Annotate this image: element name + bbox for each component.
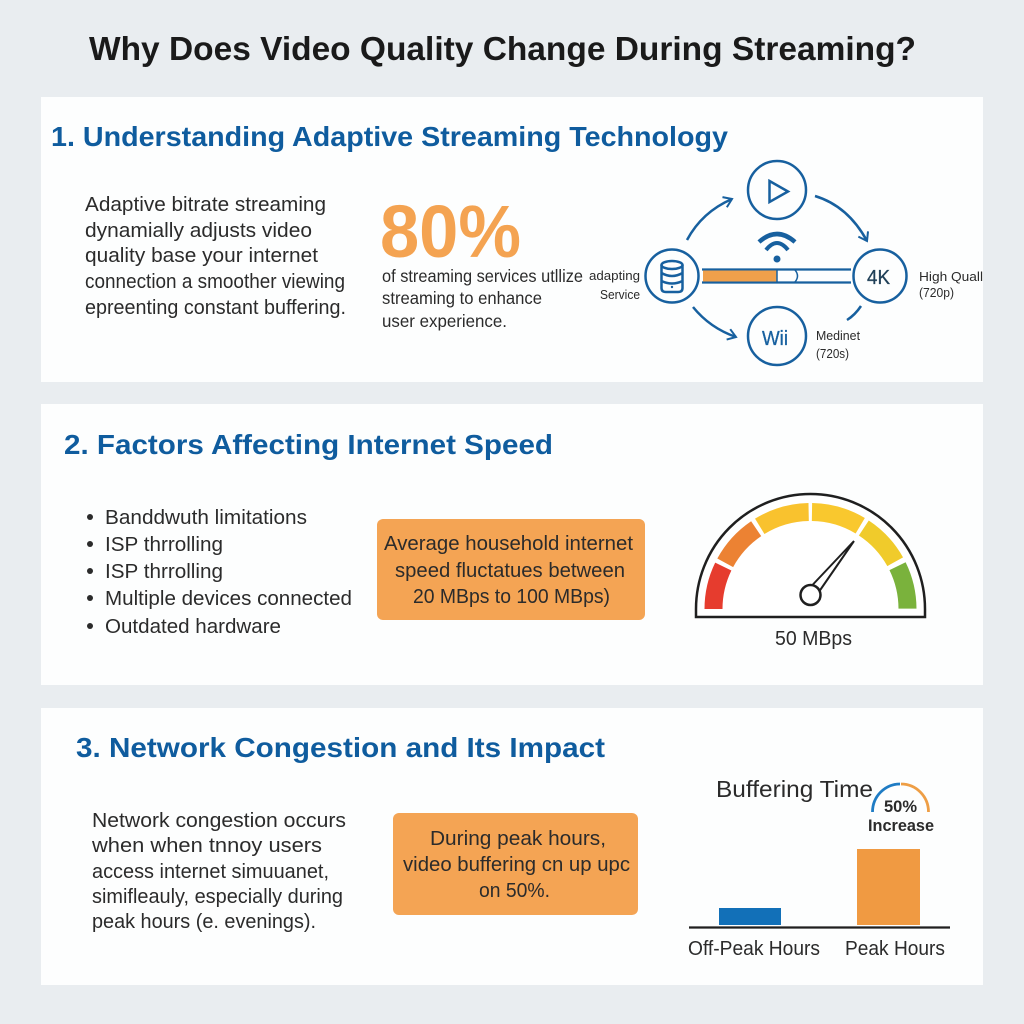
stat caption: of streaming services utllize: [382, 266, 583, 286]
text block: adaptive streaming description: epreenting constant buffering.: [85, 296, 346, 319]
callout: average household speed: Average household internet: [384, 532, 633, 555]
list: factors: [87, 506, 352, 638]
label: high quality: High Quall: [919, 269, 983, 284]
label: medium: [816, 328, 860, 361]
bar: off-peak: [719, 908, 781, 925]
stat caption: user experience.: [382, 311, 507, 331]
badge: 50 percent increase: Increase: [868, 816, 934, 835]
callout: average household speed: [377, 519, 645, 620]
stat caption: [382, 266, 583, 331]
arrow: play to 4K: [815, 196, 867, 241]
icon: database service: [646, 250, 698, 302]
callout: peak hours buffering: During peak hours,: [430, 827, 606, 850]
label: adapting service: [589, 268, 640, 302]
list: factors: Multiple devices connected: [105, 587, 352, 610]
text block: congestion description: when when tnnoy users: [91, 834, 322, 857]
label: adapting service: Service: [600, 287, 640, 302]
panel: network congestion: [41, 708, 983, 985]
list: factors: Outdated hardware: [105, 615, 281, 638]
chart title: Buffering Time: [716, 776, 873, 802]
text block: congestion description: [91, 809, 346, 933]
icon: 4K: [854, 250, 906, 302]
arrow: service to play: [687, 199, 732, 240]
text block: congestion description: peak hours (e. evenings).: [92, 910, 316, 933]
icon: wifi: [759, 234, 795, 262]
text block: adaptive streaming description: [85, 193, 346, 319]
text block: congestion description: Network congestion occurs: [92, 809, 346, 832]
arrow: 4K to Wii: [847, 306, 861, 320]
arrow: service to Wii: [693, 307, 736, 337]
panel: adaptive streaming: [41, 97, 983, 382]
diagram: adaptive streaming cycle: [589, 161, 983, 365]
title: Why Does Video Quality Change During Streaming?: [89, 31, 916, 68]
stat caption: streaming to enhance: [382, 288, 542, 308]
callout: peak hours buffering: [393, 813, 638, 915]
badge: 50 percent increase: 50%: [884, 797, 917, 816]
panel: internet speed factors: [41, 404, 983, 685]
callout: peak hours buffering: video buffering cn up upc: [403, 853, 630, 876]
text block: congestion description: simifleauly, especially during: [92, 885, 343, 908]
icon: Wii: Wii: [762, 328, 788, 350]
label: medium: (720s): [816, 346, 849, 361]
heading: section 2: 2. Factors Affecting Internet Speed: [64, 429, 553, 460]
label: adapting service: adapting: [589, 268, 640, 283]
list: factors: ISP thrrolling: [105, 560, 223, 583]
heading: section 1: 1. Understanding Adaptive Streaming Technology: [51, 121, 728, 152]
callout: average household speed: speed fluctatues between: [395, 559, 625, 582]
axis label: off-peak: Off-Peak Hours: [688, 938, 820, 960]
text block: adaptive streaming description: connection a smoother viewing: [85, 270, 345, 293]
text block: adaptive streaming description: Adaptive bitrate streaming: [85, 193, 326, 216]
icon: Wii: [748, 307, 806, 365]
gauge value: 50 MBps: [775, 628, 852, 650]
icon: 4K: 4K: [867, 267, 891, 289]
icon: play: [748, 161, 806, 219]
text block: congestion description: access internet simuuanet,: [92, 860, 329, 883]
bar: peak: [857, 849, 920, 925]
text block: adaptive streaming description: dynamially adjusts video: [85, 219, 312, 242]
label: high quality: [919, 269, 983, 300]
text block: adaptive streaming description: quality base your internet: [85, 244, 318, 267]
stat: 80 percent: 80%: [380, 190, 521, 273]
axis label: peak: Peak Hours: [845, 938, 945, 960]
chart: buffering time bars: [688, 776, 950, 960]
label: medium: Medinet: [816, 328, 860, 343]
list: factors: ISP thrrolling: [105, 533, 223, 556]
label: high quality: (720p): [919, 285, 954, 300]
callout: peak hours buffering: on 50%.: [479, 879, 550, 902]
badge: 50 percent increase: [868, 784, 934, 835]
chart: speed gauge: [696, 494, 925, 650]
list: factors: Banddwuth limitations: [105, 506, 307, 529]
heading: section 3: 3. Network Congestion and Its Impact: [76, 732, 605, 763]
gauge needle: [800, 541, 854, 605]
progress bar: [702, 270, 851, 282]
callout: average household speed: 20 MBps to 100 MBps): [413, 585, 610, 608]
